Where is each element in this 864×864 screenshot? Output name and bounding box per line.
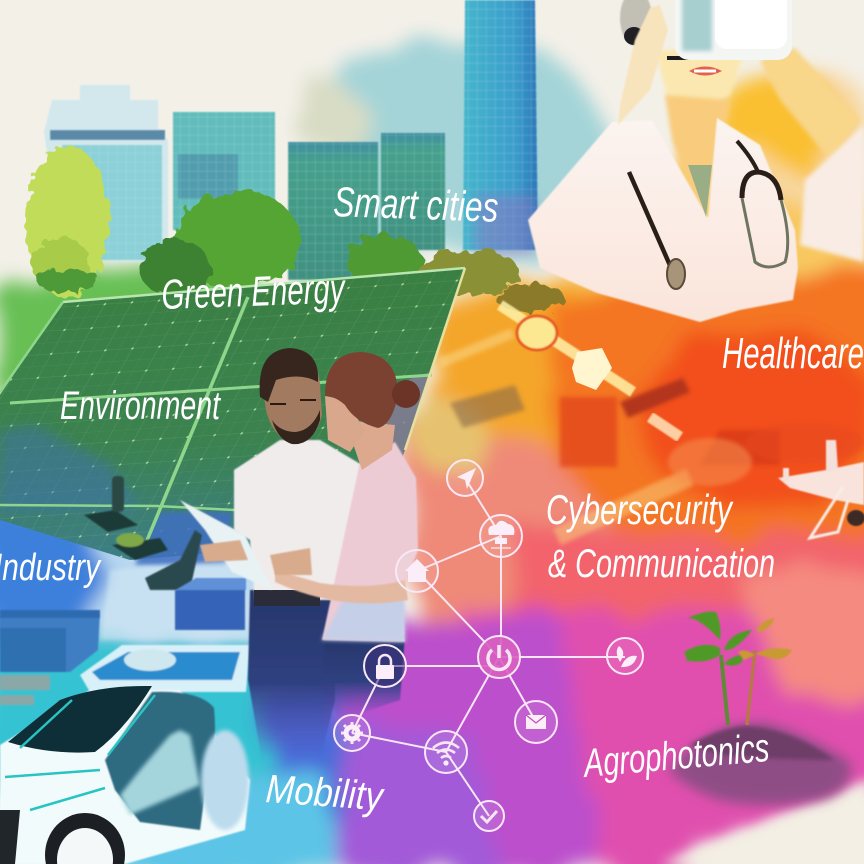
solar panels <box>0 268 465 565</box>
car windscreen <box>8 686 152 753</box>
collar shadow <box>688 165 712 217</box>
people <box>180 348 420 760</box>
label: Mobility: Mobility <box>264 767 387 819</box>
label: Agrophotonics: Agrophotonics <box>581 726 771 786</box>
label: Smart cities: Smart cities <box>333 178 499 231</box>
stethoscope <box>629 141 788 289</box>
drone <box>778 440 864 538</box>
node: cloud <box>480 515 522 557</box>
labware tools and bins <box>0 476 250 705</box>
drone legs <box>810 487 848 538</box>
bin: left blue box <box>0 610 100 672</box>
strap <box>667 56 743 60</box>
doctor face <box>655 50 745 112</box>
node: lock <box>364 645 406 687</box>
node: leaf <box>607 638 643 674</box>
arm right <box>760 48 860 160</box>
car wheel <box>0 810 125 864</box>
stems <box>721 655 728 725</box>
tray <box>80 645 250 692</box>
car stripes <box>5 695 155 810</box>
node: mail <box>515 701 557 743</box>
building: blue glass tower <box>463 0 538 255</box>
drone body <box>778 462 864 505</box>
buildings: skyline <box>44 0 538 280</box>
tool: small cylinders <box>0 675 50 705</box>
node: navigation <box>447 460 483 496</box>
bin: right blue box <box>172 578 246 630</box>
trees <box>26 146 565 312</box>
coat right <box>800 125 864 262</box>
connecting lines <box>352 478 625 816</box>
node: gear <box>334 715 370 751</box>
node: wifi <box>425 731 467 773</box>
pale beams and slabs <box>440 333 780 537</box>
rotor discs <box>668 438 752 486</box>
tool: microscopes <box>84 476 202 590</box>
building: teal block <box>173 112 275 230</box>
car door <box>201 730 249 830</box>
label: and Communication: & Communication <box>548 542 775 586</box>
node: power <box>478 636 520 678</box>
car body <box>0 690 250 864</box>
label: Cybersecurity: Cybersecurity <box>546 486 734 533</box>
drone left rotor post <box>783 468 789 482</box>
plant on soil mound <box>668 612 851 805</box>
label: Green Energy: Green Energy <box>161 265 347 318</box>
lab optics on orange <box>440 305 864 537</box>
doctor with VR headset <box>528 0 864 322</box>
man <box>234 348 362 760</box>
car seats <box>120 730 200 815</box>
node: check <box>474 801 504 831</box>
optics lower tube <box>650 417 680 437</box>
label: Environment: Environment <box>60 384 221 428</box>
soil <box>668 722 851 805</box>
paper sheets <box>180 500 272 590</box>
drone rotor arm <box>826 440 838 472</box>
lab coat <box>528 118 798 322</box>
VR headset <box>675 0 792 60</box>
table surface <box>100 560 250 640</box>
doctor hair <box>620 0 652 46</box>
car cabin <box>105 692 215 830</box>
building: green glass blocks <box>288 133 445 280</box>
hand left <box>618 5 668 125</box>
node: home <box>396 550 438 592</box>
optics tube <box>500 305 633 392</box>
woman <box>275 352 420 720</box>
doctor neck <box>665 95 730 220</box>
car <box>0 686 250 864</box>
lips <box>689 66 722 76</box>
optics ring <box>517 316 557 350</box>
network diagram <box>334 460 643 831</box>
hands <box>200 540 312 575</box>
building: pale office block <box>44 85 168 262</box>
optics cube <box>572 348 612 390</box>
leaves <box>684 612 752 666</box>
soil crest <box>690 726 835 760</box>
